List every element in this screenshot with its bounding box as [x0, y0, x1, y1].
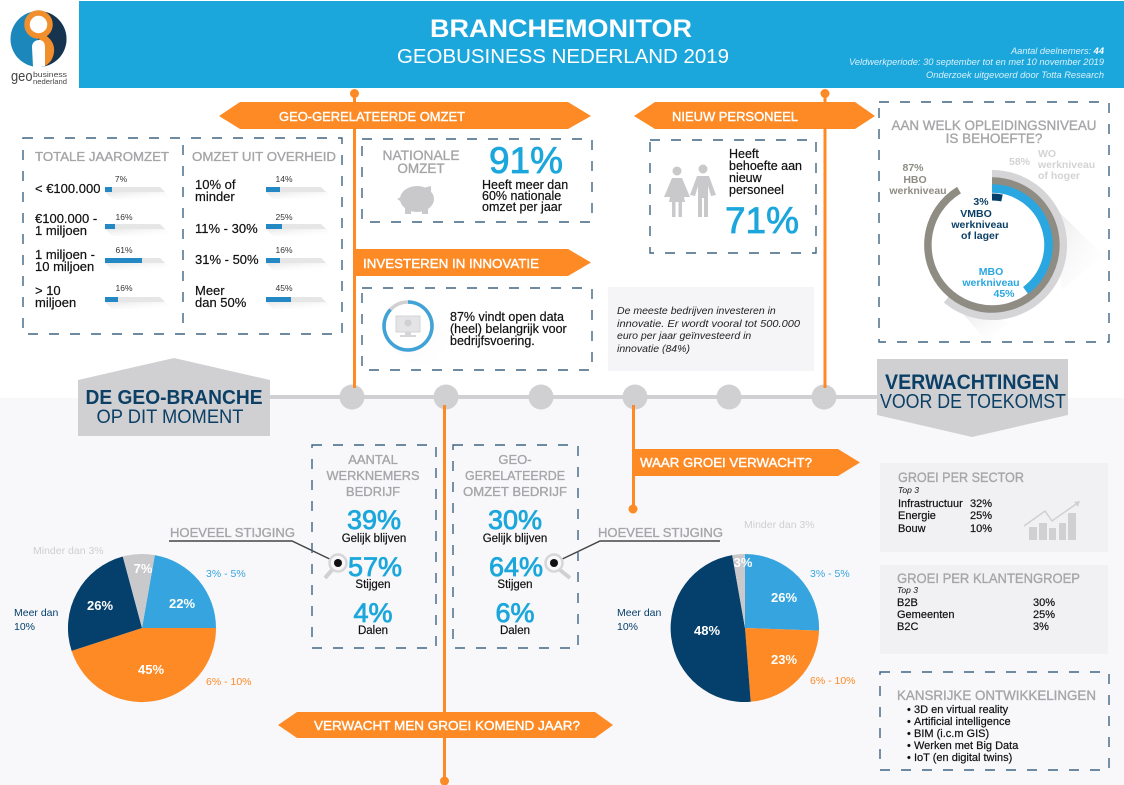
label: VMBO: 3% [973, 196, 989, 208]
label: WO: werkniveau [1037, 159, 1095, 171]
stats: 39% [347, 505, 401, 535]
panel: kansrijke ontwikkelingen: • [907, 728, 911, 740]
labels: overheid: Meer [195, 283, 225, 298]
label: MBO: werkniveau [961, 277, 1020, 289]
subtitle: GEOBUSINESS NEDERLAND 2019 [397, 46, 729, 68]
section marker: verwachtingen: VERWACHTINGEN [885, 371, 1059, 394]
label: MBO [961, 266, 1020, 300]
labels: overheid: 11% - 30% [195, 221, 258, 236]
stats: Stijgen [355, 579, 391, 591]
callout: hoeveel stijging rechts [554, 525, 723, 563]
heading: WERKNEMERS [326, 468, 420, 483]
text: 87% vindt open data [450, 310, 564, 324]
stats: Gelijk blijven [483, 533, 547, 545]
text [729, 147, 802, 197]
section marker: de geo-branche: DE GEO-BRANCHE [86, 387, 262, 409]
banner: waar groei verwacht [633, 449, 860, 476]
heading: NATIONALE [382, 148, 460, 163]
panel: kansrijke ontwikkelingen: KANSRIJKE ONTWIKKELINGEN [897, 687, 1096, 703]
banner: geo-gerelateerde omzet [219, 102, 591, 129]
pie chart: werknemers stijging: 22% [169, 596, 195, 611]
panel: aantal werknemers [312, 445, 436, 648]
bars: jaaromzet: 61% [115, 245, 133, 255]
labels: jaaromzet [35, 181, 100, 310]
banner: investeren in innovatie [354, 249, 591, 276]
pie labels: 6% - 10% [206, 676, 252, 688]
panel: innovatie toelichting: innovatie (84%) [617, 343, 690, 355]
banner: waar groei verwacht: WAAR GROEI VERWACHT? [640, 455, 812, 470]
header band [79, 1, 1124, 88]
bars: jaaromzet: 7% [115, 174, 128, 184]
text: (heel) belangrijk voor [450, 322, 567, 336]
heading: BEDRIJF [346, 484, 400, 499]
heading: AAN WELK OPLEIDINGSNIVEAU [892, 118, 1096, 133]
panel: jaaromzet en overheid [23, 138, 342, 334]
panel: groei per sector: Energie [898, 510, 936, 522]
banner: nieuw personeel: NIEUW PERSONEEL [672, 109, 798, 124]
panel: kansrijke ontwikkelingen: BIM (i.c.m GIS) [914, 728, 989, 740]
stats: Stijgen [497, 579, 533, 591]
pie labels: Minder dan 3% [33, 545, 104, 557]
pie labels: 6% - 10% [810, 675, 856, 687]
logo: geo [11, 68, 32, 85]
panel: kansrijke ontwikkelingen: • [907, 740, 911, 752]
heading: GEO- [498, 452, 532, 467]
logo [10, 11, 67, 86]
panel: kansrijke ontwikkelingen [880, 672, 1109, 770]
pie chart: omzet stijging [617, 519, 856, 702]
heading: AANTAL [348, 452, 398, 467]
text: personeel [729, 183, 784, 197]
label: WO: WO [1038, 148, 1056, 160]
stats: Gelijk blijven [342, 533, 406, 545]
bars: overheid: 45% [275, 283, 293, 293]
timeline [268, 384, 882, 410]
panel: groei per klantengroep: Gemeenten [897, 609, 954, 621]
pie labels: Meer dan [617, 607, 662, 619]
pie chart: werknemers stijging: 45% [138, 662, 164, 677]
heading: IS BEHOEFTE? [946, 131, 1042, 146]
panel: groei per sector: Infrastructuur [898, 498, 963, 510]
heading [892, 118, 1096, 146]
labels: jaaromzet: €100.000 - [35, 211, 97, 226]
callout: hoeveel stijging links: HOEVEEL STIJGING [170, 525, 295, 540]
panel: nationale omzet [362, 139, 592, 222]
pie labels: 10% [617, 621, 638, 633]
panel: kansrijke ontwikkelingen: • [907, 704, 911, 716]
heading: totale jaaromzet: TOTALE JAAROMZET [35, 149, 169, 164]
label: WO: of hoger [1038, 170, 1080, 182]
section marker: de geo-branche: OP DIT MOMENT [96, 407, 244, 428]
stats: 6% [495, 598, 535, 628]
labels: overheid: dan 50% [195, 295, 247, 310]
text: nieuw [729, 171, 763, 185]
panel: groei per sector: 32% [970, 498, 992, 510]
text: omzet per jaar [482, 200, 562, 214]
panel: groei per klantengroep: Top 3 [897, 585, 918, 595]
labels: jaaromzet: 1 miljoen - [35, 247, 95, 262]
survey details: Aantal deelnemers: 44 [1010, 46, 1105, 56]
stats: Dalen [500, 625, 530, 637]
pie labels: 3% - 5% [810, 568, 850, 580]
bars: jaaromzet [105, 174, 172, 309]
panel: kansrijke ontwikkelingen: IoT (en digital twins) [914, 752, 1012, 764]
bars: overheid: 14% [275, 174, 293, 184]
heading [326, 452, 420, 499]
labels: overheid [195, 177, 259, 310]
stats: Dalen [358, 625, 388, 637]
label: VMBO: werkniveau [950, 219, 1009, 231]
label: HBO: HBO [903, 174, 927, 186]
label: MBO: 45% [993, 288, 1015, 300]
bars: overheid: 16% [275, 245, 293, 255]
bars: overheid: 25% [275, 212, 293, 222]
panel: groei per sector: 10% [970, 523, 992, 535]
section marker: verwachtingen [877, 359, 1068, 437]
labels: jaaromzet: 1 miljoen [35, 223, 87, 238]
labels: jaaromzet: 10 miljoen [35, 259, 94, 274]
stat: 71%: 71% [725, 200, 799, 241]
text: Heeft [729, 147, 759, 161]
survey details: Onderzoek uitgevoerd door Totta Research [926, 70, 1104, 80]
icon: people [664, 164, 716, 217]
banner: verwacht men groei komend jaar: VERWACHT MEN GROEI KOMEND JAAR? [314, 718, 580, 733]
panel: groei per klantengroep: 3% [1033, 621, 1049, 633]
section marker: verwachtingen: VOOR DE TOEKOMST [880, 391, 1066, 413]
labels: jaaromzet: miljoen [35, 295, 76, 310]
callout: hoeveel stijging links [169, 525, 338, 563]
panel: innovatie toelichting [608, 287, 814, 371]
panel: kansrijke ontwikkelingen: • [907, 752, 911, 764]
label: WO: 58% [1009, 156, 1031, 168]
banner: geo-gerelateerde omzet: GEO-GERELATEERDE OMZET [279, 109, 465, 124]
panel: kansrijke ontwikkelingen: • [907, 716, 911, 728]
labels: overheid: 10% of [195, 177, 236, 192]
icon: monitor ring [384, 302, 450, 366]
bars: jaaromzet: 16% [115, 283, 133, 293]
bars: jaaromzet: 16% [115, 212, 133, 222]
labels: jaaromzet: < €100.000 [35, 181, 100, 196]
pie labels [617, 519, 856, 687]
panel: kansrijke ontwikkelingen: Artificial intelligence [914, 716, 1011, 728]
label: HBO: 87% [902, 162, 924, 174]
heading [463, 452, 567, 499]
panel: groei per klantengroep: B2C [897, 621, 918, 633]
text: behoefte aan [729, 159, 802, 173]
heading: GERELATEERDE [465, 468, 565, 483]
heading: OMZET [397, 161, 445, 176]
survey details [849, 46, 1105, 80]
text: 60% nationale [482, 189, 561, 203]
stat: 91%: 91% [489, 140, 563, 181]
panel: groei per sector [880, 463, 1108, 552]
panel: innovatie toelichting: euro per jaar geïnvesteerd in [617, 330, 751, 342]
panel: groei per sector: Bouw [898, 523, 926, 535]
pie chart: omzet stijging: 3% [734, 555, 753, 570]
stats [483, 505, 547, 637]
pie labels: 10% [14, 621, 35, 633]
pie chart: werknemers stijging [14, 545, 252, 702]
pie chart: omzet stijging: 23% [771, 652, 797, 667]
logo: business [33, 70, 67, 79]
label: HBO [888, 162, 947, 197]
text: bedrijfsvoering. [450, 334, 535, 348]
bars: overheid [266, 174, 333, 309]
banner: verwacht men groei komend jaar [278, 712, 613, 738]
logo: nederland [33, 77, 67, 86]
label: MBO: MBO [979, 266, 1003, 278]
banner: investeren in innovatie: INVESTEREN IN INNOVATIE [363, 256, 539, 271]
survey details: Veldwerkperiode: 30 september tot en met 10 november 2019 [849, 57, 1104, 67]
text: Heeft meer dan [482, 178, 568, 192]
pie chart: werknemers stijging: 7% [134, 561, 153, 576]
pie chart: omzet stijging: 26% [771, 590, 797, 605]
pie labels: Minder dan 3% [744, 519, 815, 531]
panel: opleidingsniveau [879, 102, 1109, 342]
panel: innovatie toelichting: innovatie. Er wordt vooral tot 500.000 [617, 318, 800, 330]
panel: groei per klantengroep [880, 565, 1108, 654]
icon: piggy bank [397, 186, 434, 214]
text [482, 178, 568, 214]
label: WO [1009, 148, 1095, 182]
heading: OMZET BEDRIJF [463, 484, 567, 499]
title: BRANCHEMONITOR [430, 15, 692, 43]
stats: 30% [488, 505, 542, 535]
banner: nieuw personeel [634, 102, 875, 129]
panel: groei per klantengroep: 30% [1033, 597, 1055, 609]
panel: groei per klantengroep: B2B [897, 597, 918, 609]
stats: 64% [489, 552, 543, 582]
panel: open data [362, 288, 592, 370]
pie labels [14, 545, 252, 688]
pie chart: werknemers stijging: 26% [87, 598, 113, 613]
text [450, 310, 567, 348]
panel: kansrijke ontwikkelingen: Werken met Big Data [914, 740, 1019, 752]
panel: groei per sector: GROEI PER SECTOR [898, 469, 1024, 485]
panel: groei per sector: 25% [970, 510, 992, 522]
stats [342, 505, 406, 637]
stats: 57% [348, 552, 402, 582]
panel: groei per sector: Top 3 [898, 485, 919, 495]
icon: growth chart [1024, 501, 1080, 540]
pie labels: 3% - 5% [206, 568, 246, 580]
panel: nieuw personeel [650, 140, 816, 253]
orange connector lines [350, 89, 830, 785]
labels: overheid: minder [195, 189, 235, 204]
panel: groei per klantengroep: 25% [1033, 609, 1055, 621]
panel: omzet bedrijf [453, 445, 578, 648]
callout: hoeveel stijging rechts: HOEVEEL STIJGING [598, 525, 723, 540]
icon: magnifier [325, 554, 346, 578]
pie chart: omzet stijging: 48% [694, 623, 720, 638]
label: VMBO: of lager [961, 230, 999, 242]
label: HBO: werkniveau [888, 185, 947, 197]
stats: 4% [353, 598, 393, 628]
heading: omzet uit overheid: OMZET UIT OVERHEID [192, 149, 336, 164]
label: VMBO: VMBO [960, 208, 992, 220]
pie labels: Meer dan [14, 607, 59, 619]
icon: magnifier [546, 554, 570, 578]
panel: groei per klantengroep: GROEI PER KLANTENGROEP [897, 570, 1080, 586]
section marker: de geo-branche [78, 358, 270, 436]
labels: jaaromzet: > 10 [35, 283, 61, 298]
donut chart [928, 174, 1103, 340]
panel: innovatie toelichting: De meeste bedrijven investeren in [617, 305, 776, 317]
label: VMBO [950, 196, 1009, 242]
panel: kansrijke ontwikkelingen: 3D en virtual reality [914, 704, 1009, 716]
heading [382, 148, 460, 176]
labels: overheid: 31% - 50% [195, 252, 259, 267]
